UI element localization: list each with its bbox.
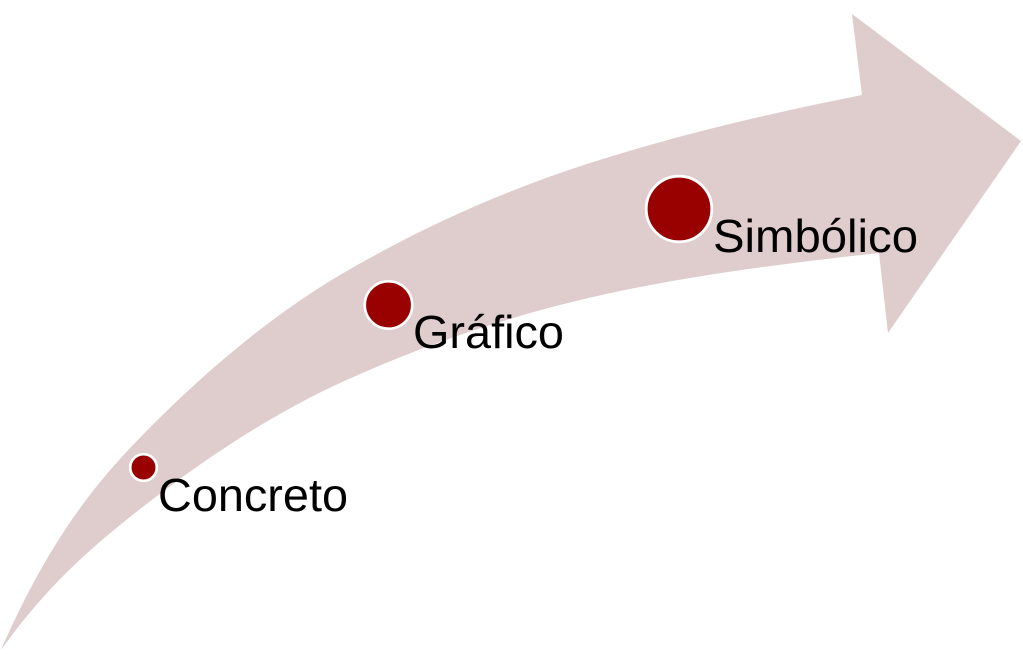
stage: Simbólico <box>646 176 918 262</box>
dot: Simbólico <box>646 176 712 242</box>
stage: Gráfico <box>365 281 564 358</box>
dot: Gráfico <box>365 281 412 329</box>
label: Gráfico: Gráfico <box>413 306 564 358</box>
label: Simbólico: Simbólico <box>713 210 918 262</box>
dot: Concreto <box>130 454 157 481</box>
label: Concreto: Concreto <box>158 469 348 521</box>
stage: Concreto <box>130 454 348 521</box>
